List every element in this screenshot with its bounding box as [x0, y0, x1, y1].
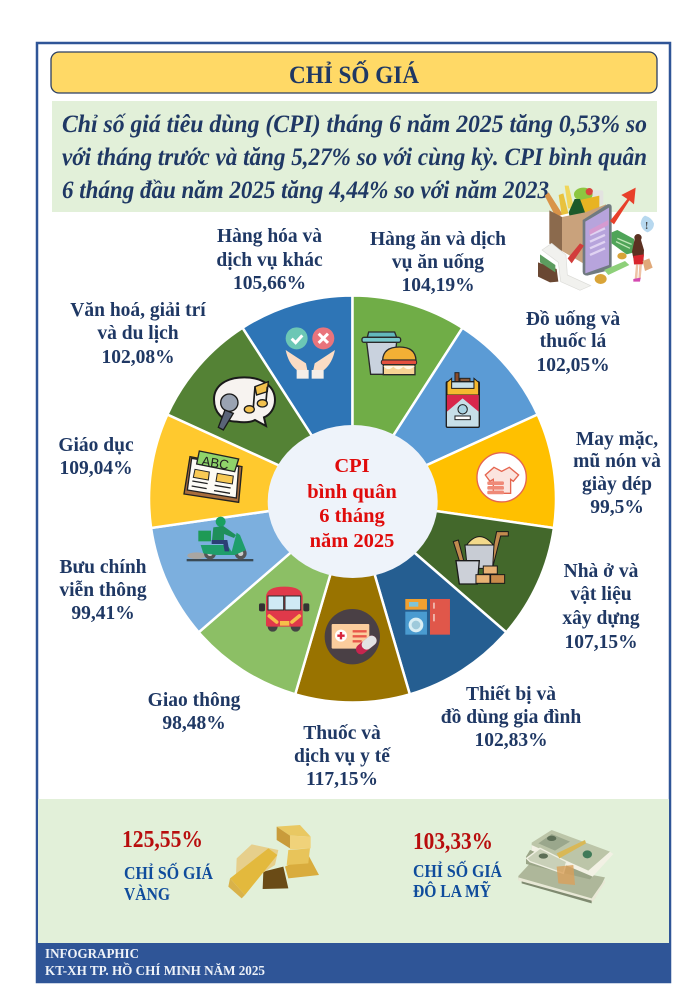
label: Thuốc và dịch vụ y tế: 117,15%: [306, 769, 378, 790]
label: Đồ uống và thuốc lá: thuốc lá: [540, 331, 607, 352]
title banner: CHỈ SỐ GIÁ: [289, 60, 419, 89]
center label: [268, 425, 438, 578]
label: Bưu chính viễn thông: viễn thông: [59, 580, 147, 601]
label: Giáo dục: 109,04%: [59, 458, 133, 479]
icon: gold bars: [228, 825, 319, 898]
wedge: Giáo dục: [149, 414, 352, 528]
label: Thuốc và dịch vụ y tế: dịch vụ y tế: [294, 746, 391, 767]
label: Nhà ở và vật liệu xây dựng: Nhà ở và: [564, 561, 639, 582]
stat: gold price index: VÀNG: [124, 883, 170, 904]
stat: US dollar price index: ĐÔ LA MỸ: [413, 880, 491, 901]
bottom panel: [38, 799, 669, 943]
wedge: Thiết bị và đồ dùng gia đình: [352, 499, 506, 694]
icon: clothes: [477, 453, 526, 502]
label: Giáo dục: Giáo dục: [58, 435, 134, 456]
label: Thiết bị và đồ dùng gia đình: 102,83%: [474, 730, 548, 751]
label: Bưu chính viễn thông: Bưu chính: [59, 557, 147, 578]
icon: shopping illustration: [538, 186, 654, 290]
label: Nhà ở và vật liệu xây dựng: xây dựng: [562, 608, 640, 629]
icon: delivery scooter: [187, 517, 253, 561]
label: Hàng ăn và dịch vụ ăn uống: Hàng ăn và dịch: [370, 229, 506, 250]
stat: US dollar price index: CHỈ SỐ GIÁ: [413, 860, 502, 881]
footer band: INFOGRAPHIC: [45, 946, 139, 961]
intro text panel: 6 tháng đầu năm 2025 tăng 4,44% so với năm 2023: [62, 177, 549, 204]
label: May mặc, mũ nón và giày dép: [573, 429, 661, 518]
wedge: Hàng hóa và dịch vụ khác: [242, 296, 352, 499]
icon: bus: [259, 587, 309, 632]
label: Đồ uống và thuốc lá: Đồ uống và: [526, 309, 620, 330]
label: Giao thông: Giao thông: [148, 690, 241, 711]
footer band: KT-XH TP. HỒ CHÍ MINH NĂM 2025: [45, 963, 265, 978]
icon: medicine: [325, 609, 380, 664]
label: Bưu chính viễn thông: [59, 557, 147, 624]
label: Giáo dục: [58, 435, 134, 479]
label: Thuốc và dịch vụ y tế: [294, 723, 391, 790]
stat: gold price index: [122, 827, 213, 904]
center label: CPI: [334, 455, 370, 477]
label: Hàng hóa và dịch vụ khác: [216, 226, 323, 294]
wedge: Bưu chính viễn thông: [151, 499, 352, 632]
icon: microphone and music: [214, 377, 275, 430]
label: Nhà ở và vật liệu xây dựng: vật liệu: [570, 584, 632, 605]
label: Nhà ở và vật liệu xây dựng: [562, 561, 640, 653]
label: May mặc, mũ nón và giày dép: 99,5%: [590, 497, 644, 518]
label: Thiết bị và đồ dùng gia đình: Thiết bị và: [466, 684, 556, 705]
intro text panel: [52, 101, 657, 212]
label: May mặc, mũ nón và giày dép: mũ nón và: [573, 451, 661, 472]
label: Hàng hóa và dịch vụ khác: 105,66%: [233, 273, 306, 294]
icon: drink and burger: [362, 332, 417, 375]
footer band: [36, 943, 671, 983]
label: Nhà ở và vật liệu xây dựng: 107,15%: [564, 632, 638, 653]
label: Văn hoá, giải trí và du lịch: và du lịch: [97, 323, 179, 344]
label: May mặc, mũ nón và giày dép: May mặc,: [576, 429, 658, 450]
label: Thiết bị và đồ dùng gia đình: đồ dùng gia đình: [441, 707, 581, 728]
icon: construction materials: [453, 532, 508, 584]
wedge: Văn hoá, giải trí và du lịch: [167, 328, 352, 499]
intro text panel: Chỉ số giá tiêu dùng (CPI) tháng 6 năm 2025 tăng 0,53% so: [62, 111, 647, 138]
label: Đồ uống và thuốc lá: [526, 309, 620, 376]
label: Bưu chính viễn thông: 99,41%: [71, 603, 135, 624]
stat: US dollar price index: [413, 829, 502, 901]
label: Hàng ăn và dịch vụ ăn uống: 104,19%: [401, 275, 475, 296]
title banner: [51, 52, 657, 93]
stat: gold price index: CHỈ SỐ GIÁ: [124, 862, 213, 883]
icon: home appliances: [405, 599, 450, 635]
label: Hàng ăn và dịch vụ ăn uống: vụ ăn uống: [392, 252, 484, 273]
label: Văn hoá, giải trí và du lịch: 102,08%: [101, 347, 175, 368]
center label: năm 2025: [310, 530, 394, 552]
stat: US dollar price index: 103,33%: [413, 829, 493, 855]
wedge: Đồ uống và thuốc lá: [352, 328, 538, 499]
wedge: Hàng ăn và dịch vụ ăn uống: [352, 296, 462, 499]
icon: hands with check and cross: [286, 327, 335, 379]
icon: stacks of dollars: [518, 830, 613, 903]
icon: ABC book: [184, 451, 242, 502]
label: Văn hoá, giải trí và du lịch: [70, 300, 206, 368]
stat: gold price index: 125,55%: [122, 827, 203, 853]
label: May mặc, mũ nón và giày dép: giày dép: [582, 474, 652, 495]
label: Văn hoá, giải trí và du lịch: Văn hoá, giải trí: [70, 300, 206, 321]
icon: shopping illustration: !: [645, 221, 648, 232]
label: Thiết bị và đồ dùng gia đình: [441, 684, 581, 751]
label: Hàng hóa và dịch vụ khác: dịch vụ khác: [216, 250, 323, 271]
label: Hàng ăn và dịch vụ ăn uống: [370, 229, 506, 296]
label: Giao thông: 98,48%: [162, 713, 226, 734]
wedge: May mặc, mũ nón và giày dép: [352, 414, 556, 528]
center label: 6 tháng: [319, 505, 385, 527]
label: Giao thông: [148, 690, 241, 734]
center label: bình quân: [307, 481, 397, 503]
icon: cigarette pack: [446, 373, 479, 427]
wedge: Thuốc và dịch vụ y tế: [295, 499, 410, 703]
icon: ABC book: ABC: [201, 453, 230, 473]
label: Thuốc và dịch vụ y tế: Thuốc và: [303, 723, 381, 744]
label: Đồ uống và thuốc lá: 102,05%: [536, 355, 610, 376]
label: Hàng hóa và dịch vụ khác: Hàng hóa và: [217, 226, 322, 247]
pie chart: [149, 296, 556, 703]
intro text panel: với tháng trước và tăng 5,27% so với cùng kỳ. CPI bình quân: [62, 144, 647, 171]
wedge: Nhà ở và vật liệu xây dựng: [352, 499, 554, 632]
wedge: Giao thông: [199, 499, 352, 694]
